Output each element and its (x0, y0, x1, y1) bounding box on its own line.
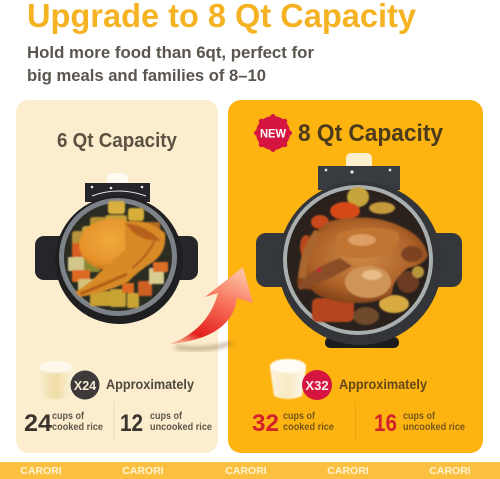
heading: 8 Qt Capacity: 8 Qt Capacity (298, 120, 444, 147)
footer band: CARORI (429, 465, 471, 477)
footer band: CARORI (225, 465, 267, 477)
badge: X24: X24 (74, 379, 96, 393)
subtitle text (27, 43, 314, 85)
badge: NEW: NEW (260, 126, 287, 140)
badge: NEW (254, 114, 292, 152)
icon: 8 Qt pressure cooker with turkey (256, 153, 462, 348)
stat: 24 cups of cooked rice: 24 (24, 410, 53, 437)
footer band: CARORI (327, 465, 369, 477)
icon: rice cup (270, 359, 306, 399)
stat: 12 cups of uncooked rice: 12 (120, 410, 143, 437)
stat: 12 cups of uncooked rice: uncooked rice (150, 421, 212, 433)
footer band: CARORI (20, 465, 62, 477)
food: vegetables (300, 187, 424, 325)
label: Approximately: Approximately (339, 376, 427, 392)
stat: 32 cups of cooked rice: 32 (252, 410, 279, 437)
arrow: upgrade from 6 Qt to 8 Qt (170, 267, 253, 349)
stat: 16 cups of uncooked rice (374, 410, 465, 437)
panel: 6 Qt capacity (16, 100, 218, 453)
heading: 6 Qt Capacity: 6 Qt Capacity (57, 130, 178, 152)
stat: 24 cups of cooked rice: cups of (52, 410, 84, 422)
food: chicken (75, 219, 165, 297)
stat: 32 cups of cooked rice (252, 410, 334, 437)
stat: 24 cups of cooked rice (24, 410, 103, 437)
footer band (0, 462, 500, 479)
stat: 16 cups of uncooked rice: cups of (403, 410, 435, 422)
food: vegetables (68, 201, 168, 308)
footer band: CARORI (122, 465, 164, 477)
stat: 12 cups of uncooked rice (120, 410, 212, 437)
badge: X32 (302, 370, 332, 400)
icon: rice cup (39, 361, 74, 399)
stat: 32 cups of cooked rice: cooked rice (283, 421, 334, 433)
stat: 16 cups of uncooked rice: uncooked rice (403, 421, 465, 433)
subtitle text: big meals and families of 8–10 (27, 66, 266, 85)
label: Approximately: Approximately (106, 376, 194, 392)
badge: X32: X32 (305, 378, 329, 393)
subtitle text: Hold more food than 6qt, perfect for (27, 43, 314, 62)
stat: 16 cups of uncooked rice: 16 (374, 410, 397, 437)
icon: 6 Qt pressure cooker with chicken (35, 173, 198, 324)
stat: 12 cups of uncooked rice: cups of (150, 410, 182, 422)
stat: 32 cups of cooked rice: cups of (283, 410, 315, 422)
panel: 8 Qt capacity (228, 100, 483, 453)
food: roast turkey (297, 217, 428, 303)
stat: 24 cups of cooked rice: cooked rice (52, 421, 103, 433)
badge: X24 (70, 370, 100, 400)
